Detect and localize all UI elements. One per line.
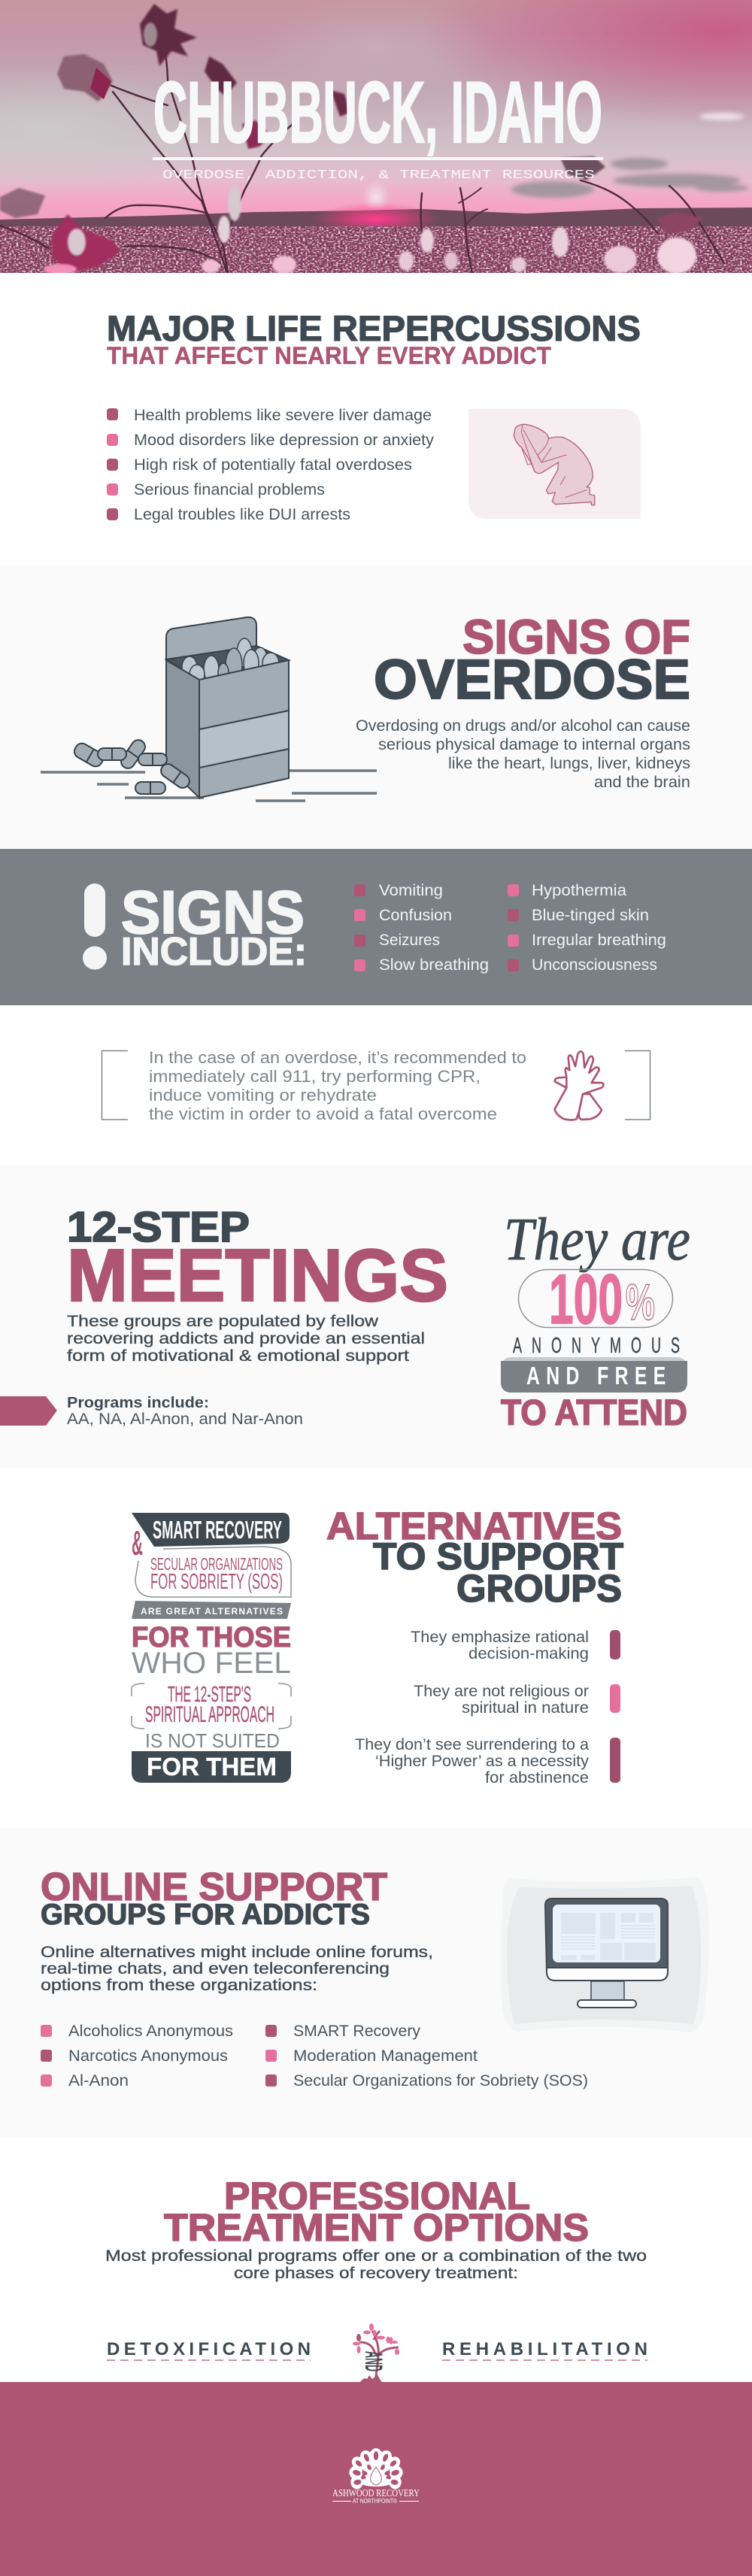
anonymous: ANONYMOUS bbox=[513, 1334, 680, 1358]
organizations list, column 2: SMART Recovery bbox=[293, 2023, 420, 2040]
stems bbox=[0, 53, 724, 273]
typographic lockup: SPIRITUAL APPROACH bbox=[145, 1702, 274, 1727]
typographic lockup: & bbox=[132, 1523, 143, 1562]
typographic lockup: FOR THEM bbox=[147, 1753, 277, 1780]
heading: ONLINE SUPPORT bbox=[41, 1865, 387, 1909]
symptom list, column 1: Vomiting bbox=[379, 882, 443, 899]
callout text: In the case of an overdose, it’s recommended to bbox=[149, 1048, 526, 1067]
typographic lockup: FOR SOBRIETY (SOS) bbox=[150, 1570, 283, 1594]
bullet list: Health problems like severe liver damage bbox=[134, 407, 432, 424]
cotton bolls bbox=[0, 4, 703, 274]
description bbox=[67, 1313, 425, 1365]
title rule bbox=[153, 157, 603, 160]
symptom list, column 2: Unconsciousness bbox=[532, 956, 657, 974]
organizations list, column 2: Moderation Management bbox=[293, 2047, 478, 2065]
description: serious physical damage to internal organs bbox=[378, 736, 690, 753]
reason 1: They emphasize rational bbox=[411, 1629, 589, 1646]
icon: tree with and: AND bbox=[360, 2351, 387, 2371]
symptom list, column 1: Slow breathing bbox=[379, 956, 489, 974]
description bbox=[105, 2247, 647, 2282]
and free text: AND FREE bbox=[526, 1363, 666, 1390]
heading: MAJOR LIFE REPERCUSSIONS bbox=[107, 308, 641, 348]
description: These groups are populated by fellow bbox=[67, 1313, 379, 1330]
symptom list, column 2 bbox=[508, 882, 666, 974]
heading: ALTERNATIVES bbox=[326, 1505, 622, 1547]
symptom list, column 1: Confusion bbox=[379, 907, 452, 924]
organizations list, column 2: Secular Organizations for Sobriety (SOS) bbox=[293, 2072, 588, 2090]
reason 2: spiritual in nature bbox=[462, 1699, 589, 1717]
heading: overdose: OVERDOSE bbox=[374, 648, 690, 711]
typographic lockup: ARE GREAT ALTERNATIVES bbox=[141, 1606, 283, 1617]
illustration: spilled pill box bbox=[41, 617, 377, 801]
panel: online support groups bbox=[0, 1828, 752, 2138]
description: form of motivational & emotional support bbox=[67, 1347, 409, 1365]
reason 3: They don’t see surrendering to a bbox=[355, 1736, 589, 1753]
organizations list, column 1: Narcotics Anonymous bbox=[68, 2047, 228, 2065]
clouds bbox=[511, 113, 749, 198]
brand tagline: AT NORTHPOINT® bbox=[353, 2498, 397, 2505]
logo: peacock mark bbox=[347, 2448, 405, 2490]
icon: desktop monitor bbox=[501, 1877, 709, 2032]
heading: TREATMENT OPTIONS bbox=[164, 2206, 589, 2249]
and free band bbox=[501, 1357, 687, 1393]
panel: signs include bbox=[0, 849, 752, 1005]
100: 100 bbox=[549, 1259, 623, 1338]
typographic lockup: THE 12-STEP'S bbox=[168, 1683, 251, 1707]
brand tagline bbox=[332, 2498, 419, 2505]
pills on the ground bbox=[72, 738, 192, 794]
description: Online alternatives might include online forums, bbox=[41, 1944, 433, 1961]
for them banner bbox=[132, 1751, 291, 1783]
bracket: left bbox=[102, 1051, 128, 1120]
panel: alternatives to support groups bbox=[0, 1468, 752, 1828]
to attend: TO ATTEND bbox=[501, 1393, 687, 1433]
typographic lockup: SECULAR ORGANIZATIONS bbox=[150, 1554, 283, 1574]
icon: tree with and bbox=[353, 2323, 399, 2382]
reason 2: They are not religious or bbox=[414, 1683, 589, 1700]
arrow marker bbox=[0, 1396, 57, 1426]
icon: crouching person bbox=[468, 409, 641, 519]
for those: FOR THOSE bbox=[132, 1622, 291, 1653]
description: and the brain bbox=[594, 774, 690, 791]
heading: GROUPS bbox=[456, 1567, 622, 1610]
reason 3: for abstinence bbox=[485, 1769, 589, 1787]
who feel: WHO FEEL bbox=[132, 1647, 291, 1680]
heading: 12-step: 12-STEP bbox=[67, 1203, 250, 1251]
pill outline bbox=[519, 1269, 672, 1328]
heading: TO SUPPORT bbox=[373, 1535, 623, 1577]
description: real-time chats, and even teleconferencing bbox=[41, 1960, 390, 1977]
description: Overdosing on drugs and/or alcohol can cause bbox=[356, 717, 690, 735]
subtitle: OVERDOSE, ADDICTION, & TREATMENT RESOURCES bbox=[162, 168, 595, 183]
heading: PROFESSIONAL bbox=[224, 2174, 530, 2217]
description: Most professional programs offer one or a combination of the two bbox=[105, 2247, 647, 2265]
heading bbox=[164, 2174, 589, 2249]
callout text: the victim in order to avoid a fatal overcome bbox=[149, 1105, 497, 1123]
hills and field bbox=[0, 208, 752, 229]
reason 2 bbox=[414, 1683, 620, 1717]
script line: They are bbox=[504, 1207, 690, 1273]
brand name: ASHWOOD RECOVERY bbox=[332, 2487, 420, 2499]
organizations list, column 1 bbox=[41, 2023, 233, 2090]
badge: 100% anonymous and free bbox=[501, 1207, 690, 1433]
label: detoxification: DETOXIFICATION bbox=[107, 2339, 311, 2359]
programs text bbox=[67, 1395, 303, 1428]
description: options from these organizations: bbox=[41, 1977, 317, 1994]
description bbox=[356, 717, 690, 791]
callout text: immediately call 911, try performing CPR, bbox=[149, 1067, 481, 1086]
programs text: AA, NA, Al-Anon, and Nar-Anon bbox=[67, 1411, 303, 1428]
heading: include: INCLUDE: bbox=[121, 930, 307, 974]
heading: signs: SIGNS bbox=[121, 879, 305, 947]
sos outline bbox=[135, 1547, 291, 1597]
heading: signs of: SIGNS OF bbox=[462, 610, 690, 664]
header photo banner bbox=[0, 0, 752, 274]
panel: professional treatment options bbox=[0, 2138, 752, 2382]
subheading: THAT AFFECT NEARLY EVERY ADDICT bbox=[107, 342, 551, 369]
panel: signs of overdose bbox=[0, 565, 752, 849]
symptom list, column 1: Seizures bbox=[379, 932, 440, 949]
typographic lockup: SMART RECOVERY bbox=[153, 1516, 282, 1544]
footer band bbox=[0, 2382, 752, 2576]
symptom list, column 2: Blue-tinged skin bbox=[532, 907, 649, 924]
panel: major life repercussions bbox=[0, 273, 752, 565]
icon: CPR hands bbox=[555, 1051, 603, 1120]
label: rehabilitation: REHABILITATION bbox=[442, 2339, 647, 2359]
great alternatives band bbox=[132, 1601, 291, 1619]
heading: meetings: MEETINGS bbox=[67, 1234, 448, 1317]
description: like the heart, lungs, liver, kidneys bbox=[448, 755, 690, 772]
bullet list: Legal troubles like DUI arrests bbox=[134, 506, 350, 523]
icon: exclamation mark bbox=[83, 883, 107, 970]
smart recovery banner bbox=[132, 1513, 290, 1547]
bullet list: Serious financial problems bbox=[134, 481, 325, 499]
callout text bbox=[149, 1048, 526, 1123]
bracket: right bbox=[625, 1051, 650, 1120]
organizations list, column 2 bbox=[265, 2023, 588, 2090]
bullet list: High risk of potentially fatal overdoses bbox=[134, 456, 412, 474]
reason 1 bbox=[411, 1629, 620, 1662]
programs text: Programs include: bbox=[67, 1395, 209, 1411]
is not suited: IS NOT SUITED bbox=[145, 1729, 280, 1752]
reason 1: decision-making bbox=[468, 1645, 589, 1662]
percent sign: % bbox=[626, 1274, 655, 1331]
typographic lockup bbox=[132, 1513, 291, 1783]
reason 3 bbox=[355, 1736, 620, 1787]
corner frame bbox=[132, 1683, 291, 1729]
heading bbox=[326, 1505, 623, 1610]
panel: overdose callout bbox=[0, 1005, 752, 1165]
description: core phases of recovery treatment: bbox=[234, 2265, 518, 2282]
description: recovering addicts and provide an essential bbox=[67, 1330, 425, 1347]
reason 3: ‘Higher Power’ as a necessity bbox=[375, 1753, 590, 1770]
panel: 12-step meetings bbox=[0, 1165, 752, 1468]
bullet list: Mood disorders like depression or anxiety bbox=[134, 432, 435, 449]
organizations list, column 1: Alcoholics Anonymous bbox=[68, 2023, 233, 2040]
description bbox=[41, 1944, 433, 1994]
symptom list, column 2: Hypothermia bbox=[532, 882, 626, 899]
symptom list, column 1 bbox=[354, 882, 489, 974]
bullet list bbox=[107, 407, 435, 523]
organizations list, column 1: Al-Anon bbox=[68, 2072, 129, 2090]
callout text: induce vomiting or rehydrate bbox=[149, 1086, 377, 1105]
subheading: GROUPS FOR ADDICTS bbox=[41, 1899, 370, 1931]
symptom list, column 2: Irregular breathing bbox=[532, 932, 666, 949]
